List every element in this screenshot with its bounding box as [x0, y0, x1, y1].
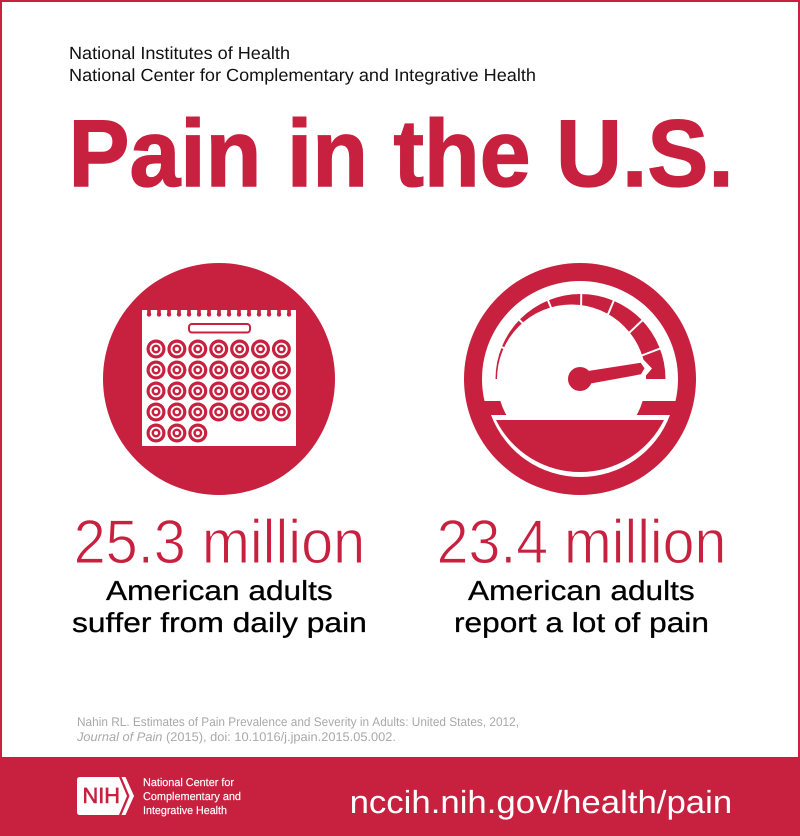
- header: organization names: National Institutes of Health: [69, 43, 290, 63]
- stat description: daily pain: suffer from daily pain: [72, 607, 367, 638]
- icon: pain gauge: [464, 263, 696, 495]
- icon: NIH logo: NIH: [82, 783, 120, 808]
- citation: Nahin RL. Estimates of Pain Prevalence and Severity in Adults: United States, 2012,: [77, 715, 519, 729]
- footer URL: nccih.nih.gov/health/pain: [350, 784, 732, 820]
- stat description: a lot of pain: American adults: [468, 575, 695, 606]
- header: organization names: [69, 43, 536, 85]
- stat description: a lot of pain: [454, 575, 709, 638]
- footer organization name: [143, 777, 241, 817]
- stat: 25.3 million: 25.3 million: [74, 508, 365, 577]
- footer organization name: Integrative Health: [143, 805, 227, 817]
- stat description: a lot of pain: report a lot of pain: [454, 607, 709, 638]
- title: Pain in the U.S.: [68, 101, 734, 207]
- citation: Journal of Pain (2015), doi: 10.1016/j.jpain.2015.05.002.: [76, 730, 396, 744]
- icon: calendar: [103, 263, 335, 495]
- footer organization name: National Center for: [143, 777, 234, 789]
- stat: 23.4 million: 23.4 million: [437, 508, 726, 577]
- citation: [76, 715, 519, 744]
- header: organization names: National Center for Complementary and Integrative Health: [69, 65, 536, 85]
- stat description: daily pain: American adults: [106, 575, 333, 606]
- stat description: daily pain: [72, 575, 367, 638]
- icon: NIH logo: [77, 777, 134, 815]
- footer band: [0, 757, 800, 836]
- footer organization name: Complementary and: [143, 791, 241, 803]
